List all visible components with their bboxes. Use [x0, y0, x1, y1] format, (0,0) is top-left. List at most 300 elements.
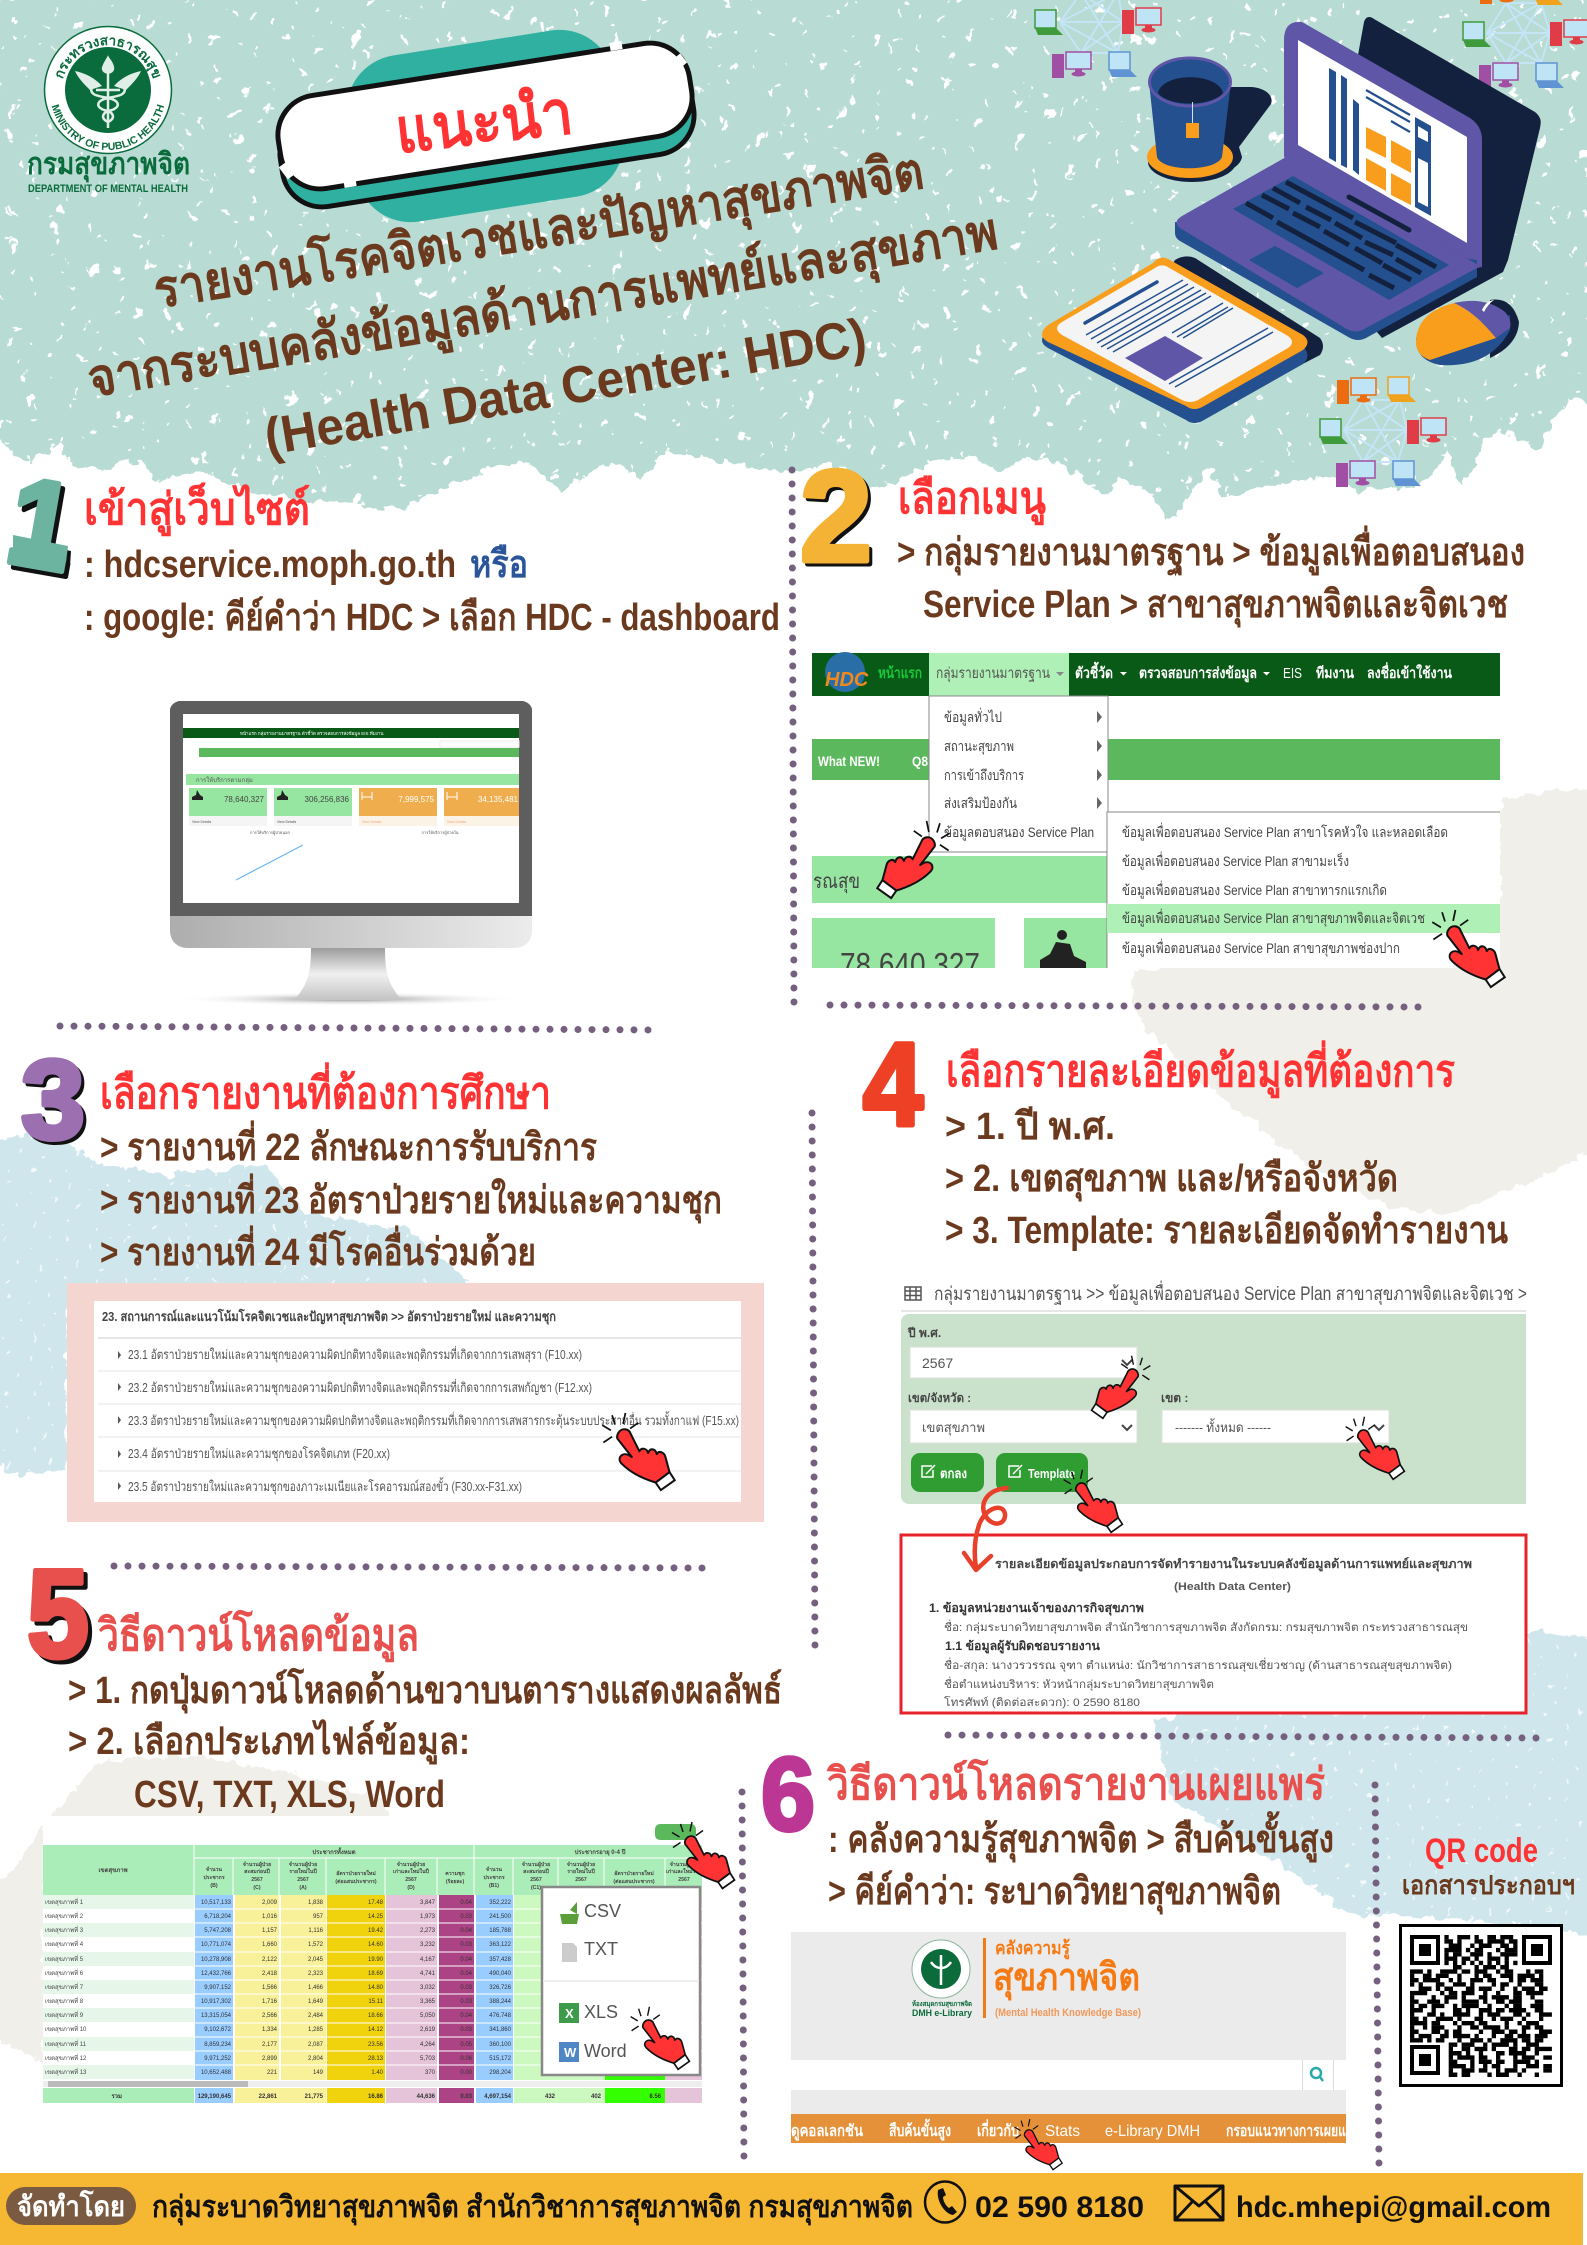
table: report result screenshot: 3,365: [420, 1999, 436, 2005]
arrow: from template button to document: [964, 1488, 1007, 1570]
screenshot: HDC menu: ส่งเสริมป้องกัน: [944, 795, 1017, 811]
table: report result screenshot: 8,859,234: [204, 2042, 232, 2048]
table: report result screenshot: 22,861: [259, 2094, 278, 2100]
screenshot: HDC menu: กลุ่มรายงานมาตรฐาน: [936, 665, 1050, 683]
form panel: 2567: [922, 1355, 953, 1371]
table: report result screenshot: เขตสุขภาพที่ 10: [45, 2025, 87, 2033]
text: step 2: > 2. เลือกประเภทไฟล์ข้อมูล:: [68, 1719, 470, 1765]
illustration: laptop: [1175, 17, 1541, 340]
table: report result screenshot: 14.60: [368, 1942, 384, 1948]
table: report result screenshot: ประชากร: [203, 1874, 225, 1881]
table: report result screenshot: 2,619: [420, 2027, 436, 2033]
screenshot: HDC menu: ข้อมูลเพื่อตอบสนอง Service Plan สาขาทารกแรกเกิด: [1122, 881, 1387, 899]
table: report result screenshot: 370: [425, 2070, 436, 2076]
number 1: 1: [0, 451, 84, 599]
pill: จัดทำโดย: จัดทำโดย: [17, 2189, 125, 2222]
table: report result screenshot: (A): [299, 1885, 307, 1891]
screenshot: mental health knowledge base: ดูคอลเลกชัน: [791, 2122, 863, 2142]
form panel: เขต/จังหวัด :: [908, 1391, 971, 1405]
table: report result screenshot: 1.40: [371, 2070, 384, 2076]
illustration: desktop monitor with HDC dashboard: การให้บริการผู้ป่วยนอก: [250, 830, 291, 836]
heading: เลือกเมนู: [898, 474, 1046, 525]
table: report result screenshot: จำนวนผู้ป่วย: [289, 1860, 317, 1869]
form panel: [901, 1314, 1526, 1504]
table: report result screenshot: 0.06: [460, 2056, 473, 2062]
screenshot: HDC menu: ข้อมูลตอบสนอง Service Plan: [944, 824, 1094, 841]
icon: table: [905, 1287, 921, 1300]
table: report result screenshot: 2,418: [262, 1971, 278, 1977]
table: report result screenshot: ประชากร: [483, 1874, 505, 1881]
form panel: เขต :: [1161, 1391, 1188, 1405]
table: report result screenshot: 18.69: [368, 1971, 384, 1977]
table: report result screenshot: 1,649: [308, 1999, 324, 2005]
table: report result screenshot: 14.25: [368, 1914, 384, 1920]
table: report result screenshot: 2567: [405, 1877, 417, 1883]
form panel: ------- ทั้งหมด ------: [1175, 1418, 1271, 1435]
screenshot: HDC menu: ลงชื่อเข้าใช้งาน: [1367, 662, 1453, 682]
table: report result screenshot: 2,484: [308, 2013, 324, 2019]
table: report result screenshot: 2,566: [262, 2013, 278, 2019]
table: report result screenshot: 2,323: [308, 1971, 324, 1977]
table: report result screenshot: 0.03: [460, 1985, 473, 1991]
table: report result screenshot: 221: [267, 2070, 278, 2076]
illustration: desktop monitor with HDC dashboard: การให้บริการผู้ป่วยใน: [421, 830, 459, 836]
screenshot: HDC menu: การเข้าถึงบริการ: [944, 767, 1024, 783]
badge: แนะนำ: แนะนำ: [392, 78, 576, 167]
QR code block: [1399, 1832, 1575, 2087]
table: report result screenshot: 0.04: [460, 1971, 473, 1977]
illustration: desktop monitor with HDC dashboard: 7,999,575: [398, 795, 435, 804]
illustration: desktop monitor with HDC dashboard: 78,640,327: [224, 795, 265, 804]
screenshot: HDC menu: 78 640 327: [840, 946, 980, 983]
table: report result screenshot: 2567: [575, 1877, 587, 1883]
table: report result screenshot: 2567: [297, 1877, 309, 1883]
table: report result screenshot: 1,016: [262, 1914, 278, 1920]
screenshot: HDC menu: รณสุข: [813, 871, 860, 894]
table: report result screenshot: เก่าและใหม่ในปี: [393, 1868, 430, 1875]
table: report result screenshot: 3,847: [420, 1900, 436, 1906]
table: report result screenshot: 13,315,054: [201, 2013, 232, 2019]
logo: department of mental health: [27, 26, 190, 195]
table: report result screenshot: 2567: [678, 1877, 690, 1883]
illustration: tea cup: [1147, 58, 1272, 182]
table: report result screenshot: 10,652,488: [201, 2070, 232, 2076]
screenshot: mental health knowledge base: e-Library DMH: [1105, 2123, 1200, 2140]
table: report result screenshot: ความชุก: [445, 1871, 465, 1877]
popup: download options: X: [565, 2006, 574, 2021]
icon: hand pointer on district: [1346, 1417, 1404, 1479]
icon: hand pointer on mental health row: [1432, 910, 1505, 987]
icon: hand pointer on xls: [631, 2007, 689, 2069]
form panel: ปี พ.ศ.: [907, 1326, 941, 1340]
table: report result screenshot: 1,566: [262, 1985, 278, 1991]
popup: download options: XLS: [584, 2002, 618, 2022]
table: report result screenshot: 4,167: [420, 1957, 436, 1963]
text: QR code: QR code: [1425, 1832, 1538, 1870]
table: report result screenshot: เขตสุขภาพที่ 8: [45, 1997, 84, 2005]
table: report result screenshot: เขตสุขภาพที่ 11: [45, 2040, 87, 2048]
table: report result screenshot: 0.03: [460, 2094, 473, 2100]
table: report result screenshot: 1,157: [262, 1928, 278, 1934]
text: report 23: > รายงานที่ 23 อัตราป่วยรายใหม่และความชุก: [100, 1173, 722, 1224]
table: report result screenshot: (ต่อแสนประชากร): [613, 1878, 655, 1885]
table: report result screenshot: 9,102,672: [204, 2027, 232, 2033]
screenshot: HDC menu: ข้อมูลเพื่อตอบสนอง Service Plan สาขามะเร็ง: [1122, 852, 1349, 870]
text: organization: กลุ่มระบาดวิทยาสุขภาพจิต สำนักวิชาการสุขภาพจิต กรมสุขภาพจิต: [152, 2191, 913, 2226]
text: year: > 1. ปี พ.ศ.: [945, 1106, 1115, 1148]
table: report result screenshot: อัตราป่วยรายใหม่: [614, 1870, 654, 1877]
table: report result screenshot: 10,771,074: [201, 1942, 232, 1948]
table: report result screenshot: 241,500: [489, 1914, 512, 1920]
section 4: เลือกรายละเอียดข้อมูลที่ต้องการ: [863, 1019, 1508, 1252]
form panel: Template: [1028, 1466, 1075, 1481]
table: report result screenshot: จำนวนผู้ป่วย: [567, 1860, 595, 1869]
illustration: network computers: [1035, 0, 1587, 487]
table: report result screenshot: 0.04: [460, 1928, 473, 1934]
table: report result screenshot: จำนวน: [486, 1866, 502, 1873]
title: (Health Data Center: HDC): [260, 308, 870, 467]
screenshot: HDC menu: EIS: [1283, 665, 1302, 682]
screenshot: HDC menu: ทีมงาน: [1316, 665, 1355, 682]
text: keyword: > คีย์คำว่า: ระบาดวิทยาสุขภาพจิต: [828, 1870, 1281, 1915]
screenshot: HDC menu: ตัวชี้วัด: [1075, 661, 1113, 682]
background: light blue blob left: [0, 1136, 469, 1477]
table: report result screenshot: (ร้อยละ): [446, 1877, 464, 1885]
table: report result screenshot: รายใหม่ในปี: [567, 1868, 595, 1875]
icon: hand pointer on template: [1064, 1470, 1122, 1532]
icon: hand pointer on download button: [672, 1822, 734, 1888]
table: report result screenshot: 44,636: [417, 2094, 436, 2100]
table: report result screenshot: [43, 1816, 703, 2105]
illustration: desktop monitor with HDC dashboard: View Details: [277, 820, 296, 824]
table: report result screenshot: 2,087: [308, 2042, 324, 2048]
table: report result screenshot: 2,804: [308, 2056, 324, 2062]
table: report result screenshot: 1,660: [262, 1942, 278, 1948]
table: report result screenshot: 0.05: [460, 2042, 473, 2048]
popup: download options: TXT: [584, 1939, 618, 1959]
table: report result screenshot: 1,285: [308, 2027, 324, 2033]
table: report result screenshot: ประชากรทั้งหมด: [312, 1846, 356, 1856]
table: report result screenshot: (C1): [531, 1885, 541, 1891]
table: report result screenshot: จำนวน: [206, 1866, 222, 1873]
illustration: desktop monitor with HDC dashboard: View Details: [447, 820, 466, 824]
panel: template document: รายละเอียดข้อมูลประกอบการจัดทำรายงานในระบบคลังข้อมูลด้านการแพทย์และสุขภาพ: [995, 1556, 1472, 1572]
table: report result screenshot: สะสมก่อนปี: [523, 1868, 550, 1875]
table: report result screenshot: 2,122: [262, 1957, 278, 1963]
table: report result screenshot: 0.03: [460, 1942, 473, 1948]
screenshot: HDC menu: HDC: [825, 669, 869, 691]
table: report result screenshot: 9,907,152: [204, 1985, 232, 1991]
table: report result screenshot: เขตสุขภาพที่ 13: [45, 2068, 87, 2076]
illustration: mouse: [1416, 299, 1519, 365]
form panel: ตกลง: [940, 1466, 967, 1481]
table: report result screenshot: 360,100: [489, 2042, 512, 2048]
section 2: เลือกเมนู: [800, 443, 1525, 628]
table: report result screenshot: 388,244: [489, 1999, 512, 2005]
table: report result screenshot: 185,788: [489, 1928, 512, 1934]
table: report result screenshot: 1,466: [308, 1985, 324, 1991]
background: beige blob right: [1130, 790, 1587, 1215]
text: report 24: > รายงานที่ 24 มีโรคอื่นร่วมด้วย: [100, 1225, 536, 1274]
table: report result screenshot: เขตสุขภาพที่ 3: [45, 1926, 84, 1934]
table: report result screenshot: 6,718,204: [204, 1914, 232, 1920]
section 5: วิธีดาวน์โหลดข้อมูล: [27, 1545, 782, 1816]
table: report result screenshot: 28.13: [368, 2056, 384, 2062]
panel: report list: 23.5 อัตราป่วยรายใหม่และความชุกของภาวะเมเนียและโรคอารมณ์สองขั้ว (F30.xx-F31.xx): [128, 1477, 522, 1495]
number 3: 3: [24, 1040, 88, 1165]
illustration: desktop monitor with HDC dashboard: หน้าแรก กลุ่มรายงานมาตรฐาน ตัวชี้วัด ตรวจสอบการส่งข้อมูล EIS ทีมงาน: [240, 730, 383, 737]
table: report result screenshot: 8.56: [649, 2094, 662, 2100]
text: email: hdc.mhepi@gmail.com: [1236, 2191, 1551, 2224]
table: report result screenshot: 3,032: [420, 1985, 436, 1991]
table: report result screenshot: 957: [313, 1914, 324, 1920]
badge: แนะนำ: [272, 22, 700, 230]
icon: hand pointer on service plan: [877, 821, 950, 898]
panel: report list: 23.3 อัตราป่วยรายใหม่และความชุกของความผิดปกติทางจิตและพฤติกรรมที่เกิดจากการเสพสารกระตุ้นระบบประสาทอื่น รวมทั้งกาแฟ (F15.xx): [128, 1411, 739, 1429]
table: report result screenshot: 432: [545, 2094, 556, 2100]
panel: template document: ชื่อ: กลุ่มระบาดวิทยาสุขภาพจิต สำนักวิชาการสุขภาพจิต สังกัดกรม: กรมสุขภาพจิต กระทรวงสาธารณสุข: [944, 1619, 1468, 1634]
footer bar: [0, 2173, 1583, 2245]
table: report result screenshot: 476,748: [489, 2013, 512, 2019]
table: report result screenshot: 1,116: [308, 1928, 324, 1934]
number 6: 6: [761, 1737, 815, 1853]
text: step 1: > 1. กดปุ่มดาวน์โหลดด้านขวาบนตารางแสดงผลลัพธ์: [68, 1667, 782, 1714]
screenshot: mental health knowledge base: คลังความรู้: [995, 1938, 1070, 1960]
table: report result screenshot: เก่าและใหม่ในปี: [666, 1868, 703, 1875]
table: report result screenshot: 1,973: [420, 1914, 436, 1920]
table: report result screenshot: 490,040: [489, 1971, 512, 1977]
text: knowledge base path: : คลังความรู้สุขภาพจิต > สืบค้นขั้นสูง: [828, 1811, 1334, 1863]
text: phone number: 02 590 8180: [975, 2191, 1144, 2224]
table: report result screenshot: 2567: [530, 1877, 542, 1883]
QR image: [1399, 1924, 1563, 2087]
table: report result screenshot: 14.12: [368, 2027, 384, 2033]
table: report result screenshot: (B1): [489, 1883, 499, 1889]
table: report result screenshot: เขตสุขภาพที่ 12: [45, 2054, 87, 2062]
table: report result screenshot: จำนวนผู้ป่วย: [243, 1860, 271, 1869]
screenshot: HDC menu: ข้อมูลทั่วไป: [944, 708, 1002, 726]
table: report result screenshot: 4,264: [420, 2042, 436, 2048]
number 3: 3: [21, 1037, 85, 1162]
table: report result screenshot: 352,222: [489, 1900, 512, 1906]
screenshot: mental health knowledge base: ห้องสมุดกรมสุขภาพจิต: [912, 1999, 972, 2008]
logo: department of mental health: DEPARTMENT OF MENTAL HEALTH: [28, 183, 188, 195]
table: report result screenshot: 17.48: [368, 1900, 384, 1906]
table: report result screenshot: เขตสุขภาพที่ 7: [45, 1983, 84, 1991]
table: report result screenshot: เขตสุขภาพ: [98, 1867, 128, 1874]
table: report result screenshot: 2,273: [420, 1928, 436, 1934]
table: report result screenshot: 21,775: [305, 2094, 324, 2100]
screenshot: mental health knowledge base: กรอบแนวทางการเผยแ: [1226, 2123, 1346, 2140]
screenshot: mental health knowledge base: DMH e-Library: [912, 2008, 973, 2019]
panel: template document: โทรศัพท์ (ติดต่อสะดวก): 0 2590 8180: [944, 1695, 1140, 1709]
popup: download options: CSV: [584, 1901, 621, 1921]
table: report result screenshot: 1,572: [308, 1942, 324, 1948]
table: report result screenshot: 1,334: [262, 2027, 278, 2033]
table: report result screenshot: (D): [407, 1885, 415, 1891]
dotted separators: [60, 470, 1537, 2165]
table: report result screenshot: (B): [210, 1883, 218, 1889]
table: report result screenshot: 357,428: [489, 1957, 512, 1963]
panel: report list: 23.1 อัตราป่วยรายใหม่และความชุกของความผิดปกติทางจิตและพฤติกรรมที่เกิดจากการเสพสุรา (F10.xx): [128, 1346, 582, 1363]
illustration: tablet: [1042, 256, 1323, 423]
number 2: 2: [800, 443, 872, 589]
table: report result screenshot: 0.03: [460, 2027, 473, 2033]
text: website address: : hdcservice.moph.go.th: [84, 544, 456, 586]
panel: template document: (Health Data Center): [1174, 1581, 1291, 1593]
form panel: เขตสุขภาพ: [922, 1420, 985, 1436]
popup: download options: W: [564, 2045, 577, 2060]
icon: phone: [925, 2182, 965, 2222]
illustration: desktop monitor with HDC dashboard: การให้บริการตามกลุ่ม: [196, 776, 253, 784]
heading: วิธีดาวน์โหลดข้อมูล: [97, 1608, 419, 1662]
heading: เลือกรายละเอียดข้อมูลที่ต้องการ: [946, 1040, 1455, 1098]
text: region: > 2. เขตสุขภาพ และ/หรือจังหวัด: [945, 1158, 1398, 1202]
number 4: 4: [863, 1019, 923, 1151]
background: top teal torn paper: [0, 0, 1587, 522]
table: report result screenshot: 1,716: [262, 1999, 278, 2005]
table: report result screenshot: เขตสุขภาพที่ 6: [45, 1969, 84, 1977]
table: report result screenshot: 2,009: [262, 1900, 278, 1906]
text: หรือ: หรือ: [470, 544, 528, 586]
table: report result screenshot: เขตสุขภาพที่ 2: [45, 1912, 84, 1920]
table: report result screenshot: รายใหม่ในปี: [289, 1868, 317, 1875]
table: report result screenshot: 149: [313, 2070, 324, 2076]
table: report result screenshot: เขตสุขภาพที่ 4: [45, 1940, 84, 1948]
table: report result screenshot: 14.80: [368, 1985, 384, 1991]
panel: report list: [67, 1283, 764, 1522]
illustration: desktop monitor with HDC dashboard: [170, 701, 532, 1006]
screenshot: HDC menu: ข้อมูลเพื่อตอบสนอง Service Plan สาขาโรคหัวใจ และหลอดเลือด: [1122, 823, 1448, 841]
table: report result screenshot: 129,190,645: [198, 2094, 232, 2100]
table: report result screenshot: 18.66: [368, 2013, 384, 2019]
table: report result screenshot: สะสมก่อนปี: [244, 1868, 271, 1875]
table: report result screenshot: จำนวนผู้ป่วย: [522, 1860, 550, 1869]
icon: hand pointer on nav: [1015, 2119, 1062, 2170]
screenshot: mental health knowledge base: สุขภาพจิต: [993, 1957, 1140, 2001]
section 3: เลือกรายงานที่ต้องการศึกษา: [21, 1037, 722, 1274]
title: [83, 139, 1002, 467]
table: report result screenshot: 23.56: [368, 2042, 384, 2048]
table: report result screenshot: 0.04: [460, 2013, 473, 2019]
table: report result screenshot: 341,860: [489, 2027, 512, 2033]
table: report result screenshot: 10,517,133: [201, 1900, 232, 1906]
table: report result screenshot: 515,172: [489, 2056, 512, 2062]
table: report result screenshot: 0.00: [460, 2070, 473, 2076]
table: report result screenshot: 402: [591, 2094, 602, 2100]
section 6: วิธีดาวน์โหลดรายงานเผยแพร่: [761, 1737, 1334, 1915]
table: report result screenshot: 16.86: [368, 2094, 384, 2100]
table: report result screenshot: 2,177: [262, 2042, 278, 2048]
panel: template document: ชื่อตำแหน่งบริหาร: หัวหน้ากลุ่มระบาดวิทยาสุขภาพจิต: [944, 1676, 1214, 1691]
number 2: 2: [803, 446, 875, 592]
table: report result screenshot: 363,122: [489, 1942, 512, 1948]
illustration: desktop monitor with HDC dashboard: 306,256,836: [304, 795, 350, 804]
number 5: 5: [31, 1549, 93, 1688]
table: report result screenshot: จำนวนผู้ป่วย: [670, 1860, 698, 1869]
screenshot: HDC menu: [812, 652, 1500, 983]
heading: เข้าสู่เว็บไซต์: [84, 482, 310, 536]
title: จากระบบคลังข้อมูลด้านการแพทย์และสุขภาพ: [83, 202, 1002, 412]
screenshot: HDC menu: ตรวจสอบการส่งข้อมูล: [1139, 665, 1257, 683]
table: report result screenshot: 1,838: [308, 1900, 324, 1906]
table: report result screenshot: 326,726: [489, 1985, 512, 1991]
table: report result screenshot: 10,917,302: [201, 1999, 232, 2005]
table: report result screenshot: 9,971,252: [204, 2056, 232, 2062]
logo: department of mental health: MINISTRY OF PUBLIC HEALTH: [52, 104, 164, 150]
screenshot: mental health knowledge base: Stats: [1045, 2123, 1080, 2140]
number 1: 1: [1, 456, 88, 604]
screenshot: HDC menu: ข้อมูลเพื่อตอบสนอง Service Plan สาขาสุขภาพช่องปาก: [1122, 939, 1400, 957]
panel: template document: 1.1 ข้อมูลผู้รับผิดชอบรายงาน: [945, 1639, 1101, 1654]
heading: วิธีดาวน์โหลดรายงานเผยแพร่: [826, 1757, 1325, 1809]
table: report result screenshot: 10,278,908: [201, 1957, 232, 1963]
table: report result screenshot: 19.90: [368, 1957, 384, 1963]
table: report result screenshot: 0.03: [460, 1914, 473, 1920]
illustration: desktop monitor with HDC dashboard: View Details: [362, 820, 381, 824]
table: report result screenshot: 5,703: [420, 2056, 436, 2062]
table: report result screenshot: 5,747,208: [204, 1928, 232, 1934]
icon: envelope: [1175, 2186, 1223, 2220]
popup: download options: [542, 1887, 700, 2075]
title: รายงานโรคจิตเวชและปัญหาสุขภาพจิต: [149, 139, 928, 323]
table: report result screenshot: เขตสุขภาพที่ 1: [45, 1898, 84, 1906]
screenshot: mental health knowledge base: (Mental Health Knowledge Base): [995, 2007, 1141, 2019]
table: report result screenshot: (C): [253, 1885, 261, 1891]
text: google instructions: : google: คีย์คำว่า HDC > เลือก HDC - dashboard: [84, 596, 780, 639]
screenshot: HDC menu: ข้อมูลเพื่อตอบสนอง Service Plan สาขาสุขภาพจิตและจิตเวช: [1122, 909, 1425, 927]
text: file types: CSV, TXT, XLS, Word: [134, 1774, 445, 1816]
popup: download options: Word: [584, 2041, 627, 2061]
panel: report list: 23.4 อัตราป่วยรายใหม่และความชุกของโรคจิตเภท (F20.xx): [128, 1446, 390, 1462]
table: report result screenshot: 3,232: [420, 1942, 436, 1948]
table: report result screenshot: 0.04: [460, 1957, 473, 1963]
screenshot: mental health knowledge base: สืบค้นขั้นสูง: [889, 2118, 951, 2142]
screenshot: HDC menu: หน้าแรก: [878, 665, 922, 682]
table: report result screenshot: 0.03: [460, 1999, 473, 2005]
logo: department of mental health: กรมสุขภาพจิต: [27, 148, 190, 183]
icon: hand pointer on report row: [602, 1413, 675, 1490]
table: report result screenshot: จำนวนผู้ป่วย: [397, 1860, 425, 1869]
screenshot: HDC menu: สถานะสุขภาพ: [944, 738, 1014, 755]
panel: report list: 23. สถานการณ์และแนวโน้มโรคจิตเวชและปัญหาสุขภาพจิต >> อัตราป่วยรายใหม่ และความชุก: [102, 1308, 556, 1325]
screenshot: mental health knowledge base: [791, 1932, 1346, 2143]
heading: เลือกรายงานที่ต้องการศึกษา: [100, 1062, 551, 1118]
table: report result screenshot: 19.42: [368, 1928, 384, 1934]
illustration: desktop monitor with HDC dashboard: 34,135,481: [478, 795, 519, 804]
table: report result screenshot: 4,697,154: [484, 2094, 512, 2100]
table: report result screenshot: 15.11: [368, 1999, 384, 2005]
table: report result screenshot: 2,045: [308, 1957, 324, 1963]
background: light blue blob lower right: [1156, 1632, 1587, 1940]
panel: template document: 1. ข้อมูลหน่วยงานเจ้าของภารกิจสุขภาพ: [929, 1601, 1144, 1616]
icon: hand pointer on year: [1092, 1356, 1150, 1418]
table: report result screenshot: (ต่อแสนประชากร): [335, 1878, 377, 1885]
text: report 22: > รายงานที่ 22 ลักษณะการรับบริการ: [100, 1120, 597, 1169]
table: report result screenshot: เขตสุขภาพที่ 5: [45, 1955, 84, 1963]
table: report result screenshot: ประชากรอายุ 0-4 ปี: [575, 1848, 626, 1856]
table: report result screenshot: เขตสุขภาพที่ 9: [45, 2011, 84, 2019]
background: beige blob lower left: [0, 1755, 388, 2064]
panel: template document: ชื่อ-สกุล: นางวรวรรณ จุฑา ตำแหน่ง: นักวิชาการสาธารณสุขเชี่ยวชาญ (ด้านสาธารณสุขสุขภาพจิต): [944, 1657, 1452, 1672]
screenshot: report filter form: [901, 1280, 1527, 1504]
screenshot: HDC menu: Q8: [912, 753, 928, 769]
screenshot: mental health knowledge base: เกี่ยวกับ: [977, 2119, 1019, 2140]
illustration: desktop monitor with HDC dashboard: View Details: [192, 820, 211, 824]
table: report result screenshot: 0.04: [460, 1900, 473, 1906]
table: report result screenshot: 298,204: [489, 2070, 512, 2076]
panel: template document: [901, 1535, 1526, 1713]
